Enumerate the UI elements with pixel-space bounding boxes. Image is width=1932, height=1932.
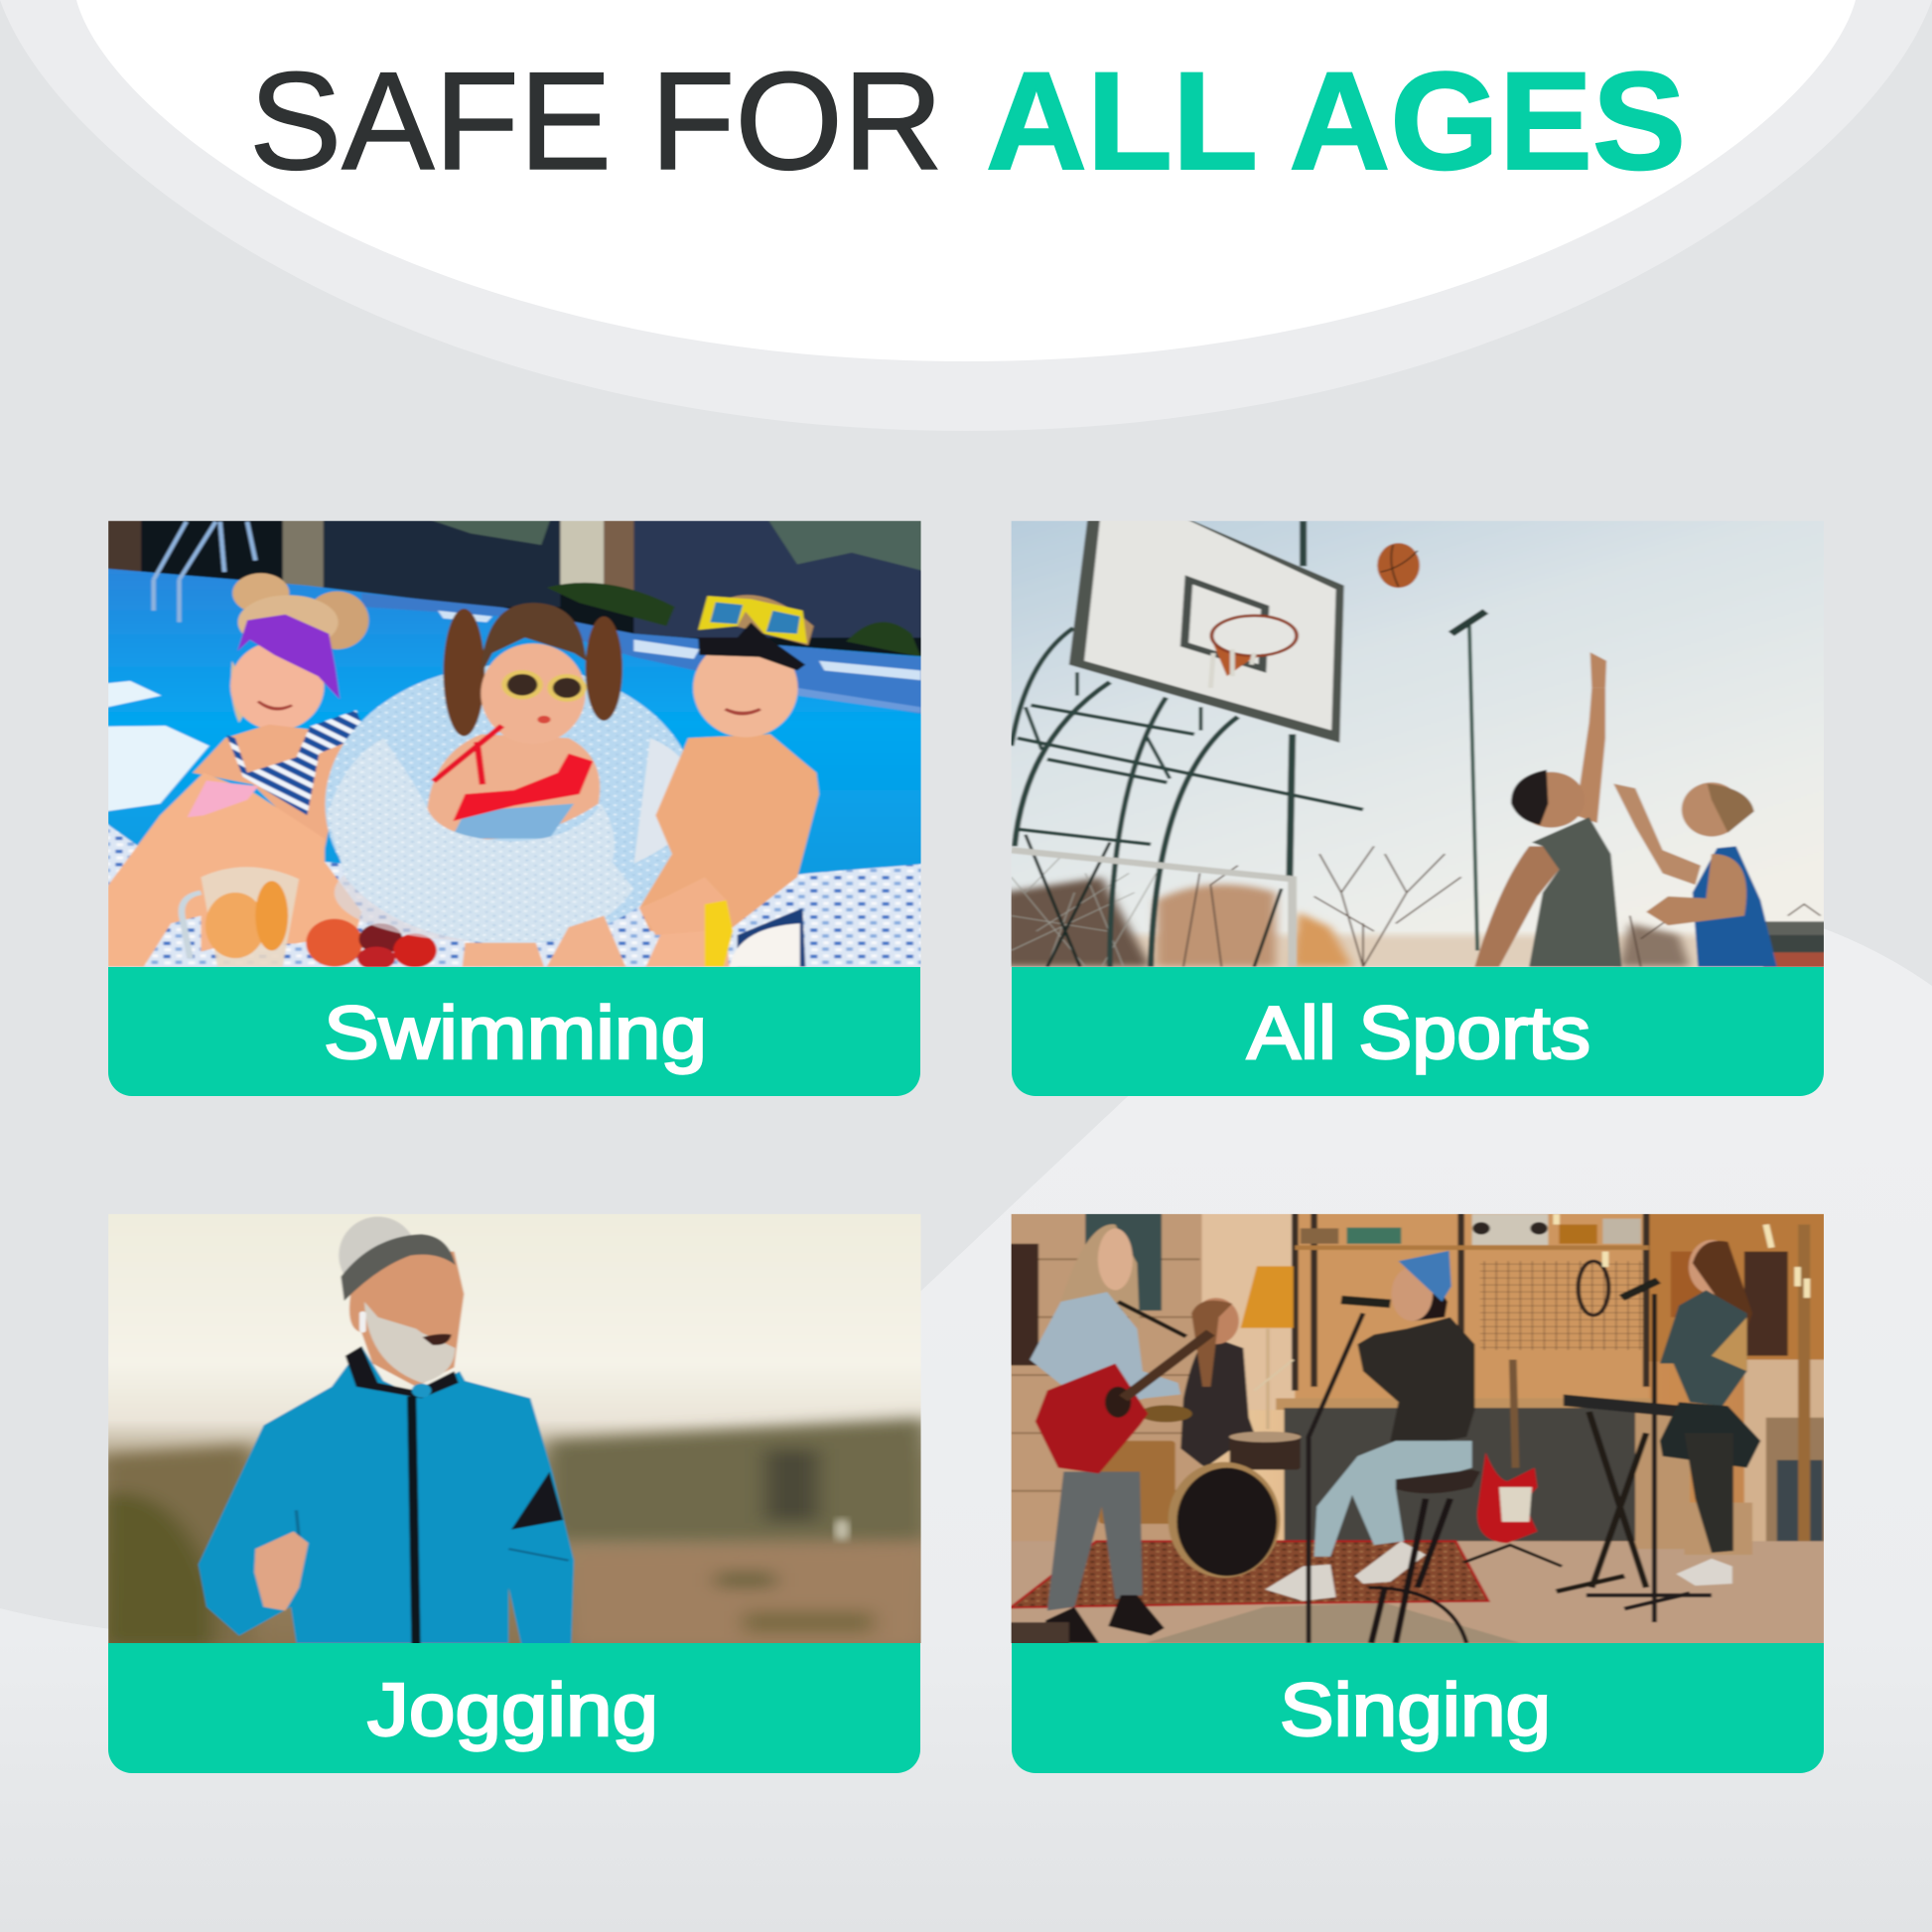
fruit xyxy=(306,918,362,967)
girl 2 xyxy=(444,609,484,736)
panel: swimming xyxy=(100,514,928,1096)
cabinet and floor xyxy=(1276,1398,1652,1410)
ring front xyxy=(327,738,633,944)
label bar xyxy=(1012,1643,1824,1773)
shelves xyxy=(1295,1209,1646,1395)
photo: band rehearsing xyxy=(1004,1209,1832,1649)
label: Jogging: Jogging xyxy=(367,1668,658,1751)
inflatable ring xyxy=(325,665,698,944)
photo: senior man jogging xyxy=(100,1209,928,1649)
lamp xyxy=(1241,1266,1294,1328)
player 1 xyxy=(1474,846,1559,967)
drums xyxy=(1099,1441,1175,1524)
panel: jogging xyxy=(100,1209,928,1773)
label: Singing: Singing xyxy=(1280,1668,1551,1751)
panel: all sports xyxy=(1004,514,1832,1096)
title xyxy=(249,43,1686,199)
bare trees xyxy=(1012,846,1821,967)
hoop xyxy=(1213,643,1259,677)
singer xyxy=(1415,1293,1449,1321)
label bar xyxy=(108,967,920,1096)
jug xyxy=(201,867,299,967)
guitarist xyxy=(1047,1471,1143,1610)
mic stands xyxy=(1309,1294,1654,1643)
drummer xyxy=(1180,1336,1254,1467)
title: ALL AGES xyxy=(986,43,1686,199)
man: jacket xyxy=(199,1346,574,1649)
backboard xyxy=(1069,514,1344,743)
label bar xyxy=(108,1643,920,1773)
lower light background shape xyxy=(0,897,1932,1932)
keyboard player xyxy=(1688,1239,1718,1295)
boy xyxy=(639,735,819,931)
man: head xyxy=(338,1216,411,1273)
girl 1 xyxy=(232,573,289,614)
header outer arc xyxy=(0,0,1932,431)
basketball xyxy=(1377,543,1420,588)
header white arc xyxy=(76,0,1856,361)
frame xyxy=(1012,521,1363,967)
label bar xyxy=(1012,967,1824,1096)
electric guitar xyxy=(1513,1360,1516,1467)
panel: singing xyxy=(1004,1209,1832,1773)
photo: children at the pool xyxy=(100,514,928,974)
player 2 xyxy=(1613,783,1701,885)
photo: basketball players xyxy=(1004,514,1832,974)
label: All Sports: All Sports xyxy=(1247,991,1590,1074)
light pole xyxy=(1469,622,1477,950)
label: Swimming: Swimming xyxy=(324,991,707,1074)
keyboard xyxy=(1564,1395,1685,1418)
title: SAFE FOR xyxy=(249,43,943,199)
